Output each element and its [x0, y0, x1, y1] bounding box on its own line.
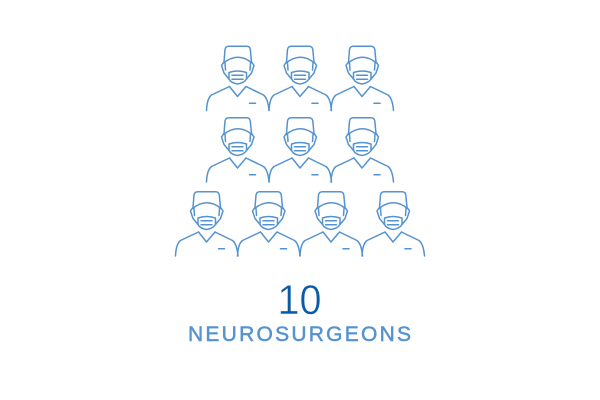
- surgeon icon 6: [331, 118, 394, 182]
- surgeon icon 1: [206, 46, 269, 110]
- row 2 of surgeons: [206, 118, 394, 182]
- surgeon icon 2: [269, 46, 332, 110]
- surgeon icon 4: [206, 118, 269, 182]
- surgeon icon 5: [269, 118, 332, 182]
- surgeon icon 8: [238, 192, 300, 256]
- number: 10: 10: [278, 276, 322, 323]
- label: NEUROSURGEONS: NEUROSURGEONS: [188, 323, 411, 346]
- surgeon icon 3: [331, 46, 394, 110]
- surgeon icon 7: [176, 192, 238, 256]
- surgeon icon 9: [300, 192, 362, 256]
- row 1 of surgeons: [206, 46, 394, 110]
- row 3 of surgeons: [176, 192, 424, 256]
- surgeon icon 10: [362, 192, 424, 256]
